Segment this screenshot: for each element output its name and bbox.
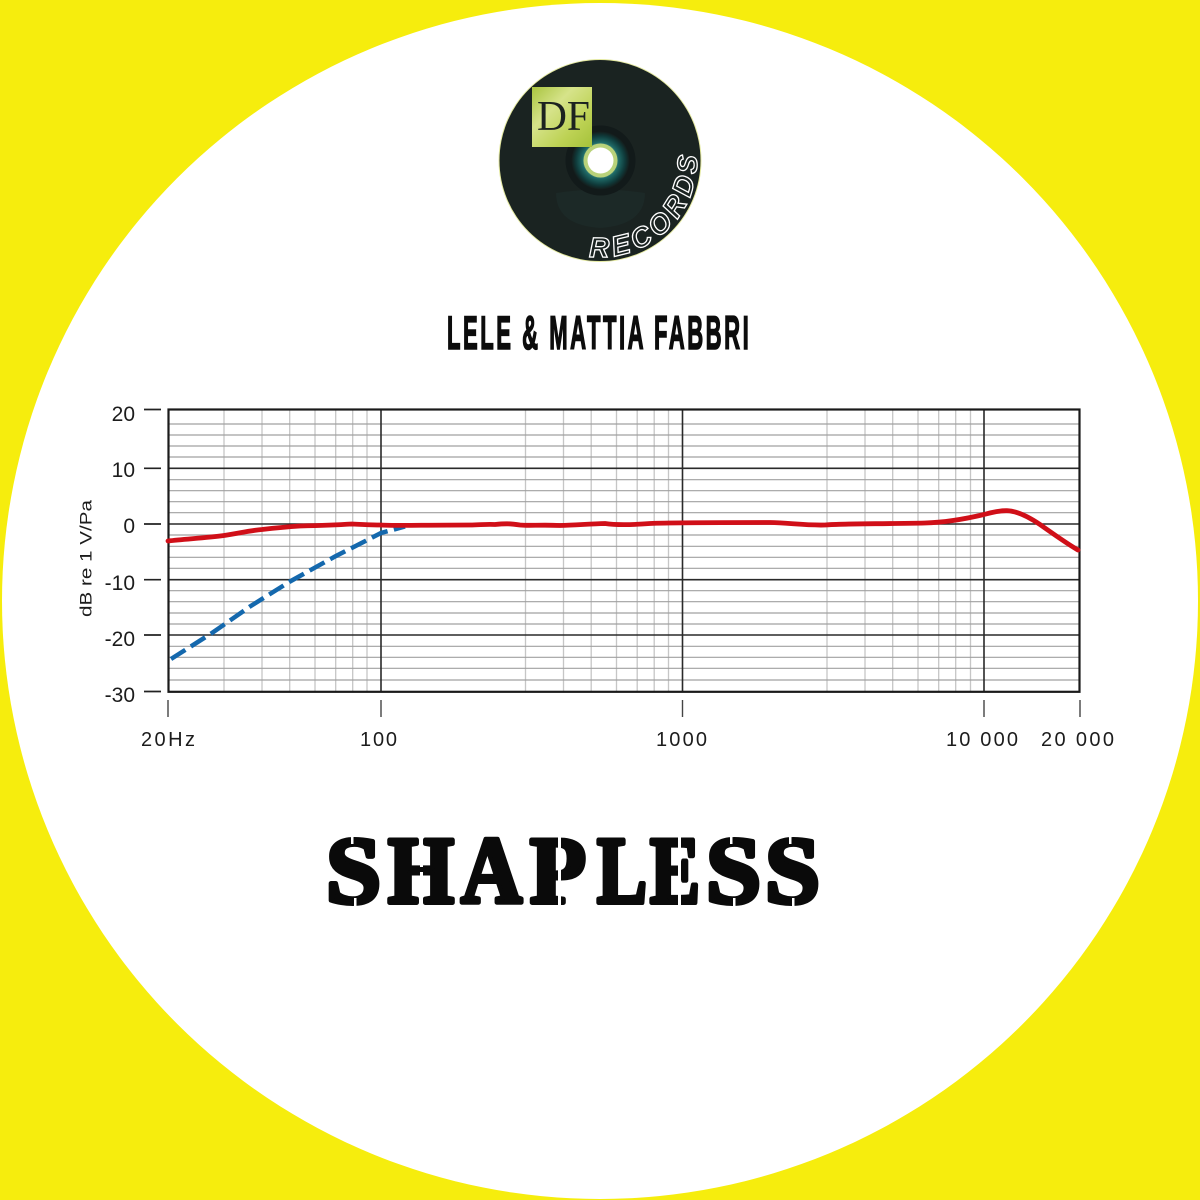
y axis labels — [105, 403, 135, 707]
icon: DF square logo — [532, 87, 592, 147]
release title: L — [597, 818, 647, 924]
y axis labels: -10 — [105, 572, 135, 595]
chart grid: minor vertical lines — [224, 409, 970, 692]
release title: H — [388, 818, 454, 924]
x axis labels: 20 000 — [1041, 729, 1114, 751]
icon: disc lower shadow shape — [556, 190, 645, 228]
x axis labels: 10 000 — [946, 729, 1018, 751]
y axis labels: 20 — [112, 403, 135, 426]
chart frame — [168, 410, 1080, 692]
red frequency response curve — [168, 511, 1078, 550]
release title: A — [461, 818, 522, 924]
artist name: LELE & MATTIA FABBRI — [447, 307, 749, 359]
x axis labels: 20Hz — [141, 729, 195, 751]
chart grid: minor horizontal lines — [168, 424, 1079, 680]
release title: S — [706, 818, 761, 924]
frequency response chart — [76, 403, 1114, 751]
release title: S — [765, 818, 820, 924]
x axis labels: 100 — [360, 729, 397, 751]
x axis labels: 1000 — [656, 729, 707, 751]
release title: S — [326, 818, 381, 924]
release title: E — [650, 818, 700, 924]
logo: DF Records disc — [498, 59, 702, 262]
y axis labels: -20 — [105, 628, 135, 651]
x axis labels — [141, 729, 1114, 751]
chart grid: major lines — [168, 409, 1079, 692]
y axis labels: -30 — [105, 684, 135, 707]
y axis tick marks — [144, 410, 161, 692]
stencil bridges — [351, 832, 794, 910]
y axis labels: 0 — [123, 515, 135, 538]
logo wordmark: RECORDS: RECORDS — [588, 154, 698, 258]
icon: disc hub — [566, 126, 636, 196]
icon: DF square logo: DF — [537, 94, 590, 140]
release title — [326, 818, 820, 924]
y axis title: dB re 1 V/Pa — [76, 499, 96, 617]
blue dashed low-cut curve — [171, 526, 405, 659]
y axis labels: 10 — [112, 459, 135, 482]
release title: P — [530, 818, 586, 924]
x axis tick marks — [168, 700, 1080, 717]
